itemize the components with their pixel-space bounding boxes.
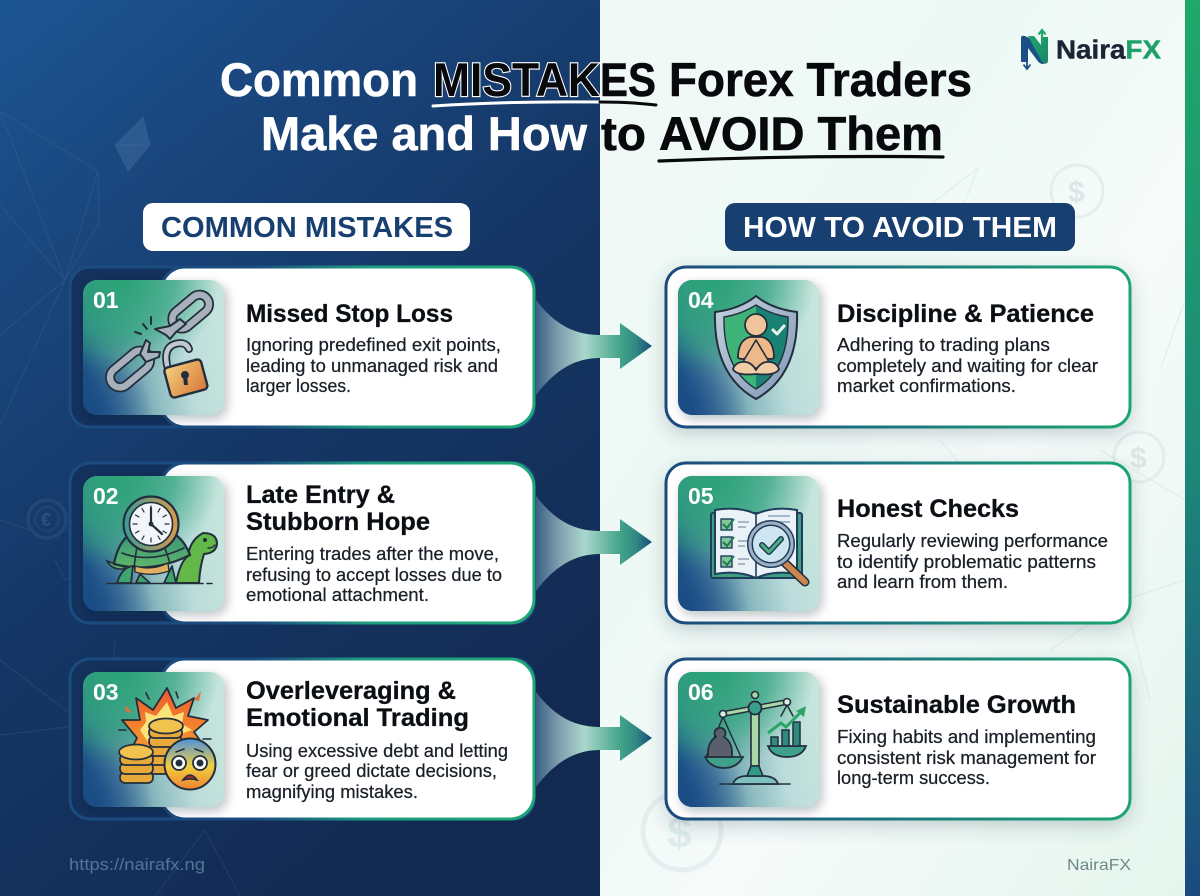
- title: Make and How: [261, 107, 587, 160]
- title: ES: [600, 53, 656, 106]
- description 02: [246, 544, 502, 605]
- description 04: [837, 335, 1098, 396]
- heading: how to avoid them: [725, 203, 1075, 251]
- title: Forex Traders: [669, 53, 972, 106]
- description 02: refusing to accept losses due to: [246, 565, 502, 585]
- panel: mistake 01: [70, 267, 534, 427]
- description 03: magnifying mistakes.: [246, 782, 418, 802]
- heading 03: Emotional Trading: [246, 704, 469, 732]
- description 05: Regularly reviewing performance: [837, 531, 1108, 551]
- heading 02: Stubborn Hope: [246, 508, 430, 536]
- heading 02: [246, 481, 430, 536]
- description 05: to identify problematic patterns: [837, 552, 1096, 572]
- left dark background panel: [0, 0, 600, 896]
- logo wordmark: NairaFX: [1056, 36, 1161, 64]
- title: AVOID Them: [659, 107, 943, 160]
- description 04: market confirmations.: [837, 376, 1016, 396]
- icon: broken chain and padlock: [106, 291, 213, 398]
- icon tile 02: 02: [93, 483, 119, 509]
- panel: solution 05: [666, 463, 1130, 623]
- heading: how to avoid them: HOW TO AVOID THEM: [743, 212, 1057, 244]
- right edge gradient strip: [1185, 0, 1200, 896]
- icon: open book with magnifier: [711, 509, 805, 582]
- icon tile 04: 04: [688, 287, 714, 313]
- panel: mistake 02: [70, 463, 534, 623]
- description 05: [837, 531, 1108, 592]
- background pattern right: $: [1068, 176, 1085, 209]
- icon tile 03: [83, 672, 224, 807]
- title: to: [601, 107, 646, 160]
- heading 03: [246, 677, 469, 732]
- description 03: fear or greed dictate decisions,: [246, 761, 497, 781]
- arrow 2: [536, 496, 652, 591]
- background pattern right: [643, 165, 1185, 870]
- description 03: [246, 741, 508, 802]
- icon tile 01: 01: [93, 287, 119, 313]
- arrow 1: [536, 300, 652, 395]
- heading: common mistakes: [143, 203, 470, 251]
- description 06: long-term success.: [837, 768, 990, 788]
- icon: shield with meditating person: [715, 296, 797, 399]
- icon: explosion, coins and scared face: [119, 688, 216, 790]
- description 03: Using excessive debt and letting: [246, 741, 508, 761]
- description 06: Fixing habits and implementing: [837, 727, 1096, 747]
- right light background panel: [600, 0, 1200, 896]
- background pattern left: [0, 111, 240, 896]
- heading 05: Honest Checks: [837, 495, 1019, 523]
- description 06: [837, 727, 1096, 788]
- icon tile 02: [83, 476, 224, 611]
- description 05: and learn from them.: [837, 572, 1008, 592]
- description 01: larger losses.: [246, 376, 351, 396]
- title: Common: [220, 53, 418, 106]
- icon: NairaFX logo mark: [1021, 30, 1048, 69]
- icon tile 01: [83, 280, 224, 415]
- panel: solution 06: [666, 659, 1130, 819]
- arrow 3: [536, 692, 652, 787]
- description 01: Ignoring predefined exit points,: [246, 335, 501, 355]
- description 02: Entering trades after the move,: [246, 544, 499, 564]
- background pattern right: $: [667, 809, 691, 858]
- icon: balance scale with growth chart: [705, 692, 806, 784]
- icon tile 04: [678, 280, 819, 415]
- icon tile 06: 06: [688, 679, 714, 705]
- background pattern left: €: [41, 510, 51, 530]
- description 02: emotional attachment.: [246, 585, 429, 605]
- heading 06: Sustainable Growth: [837, 691, 1076, 719]
- footer url: https://nairafx.ng: [69, 855, 205, 874]
- description 06: consistent risk management for: [837, 748, 1096, 768]
- title: [220, 53, 972, 161]
- title: MISTAK: [433, 53, 600, 106]
- icon tile 06: [678, 672, 819, 807]
- description 01: [246, 335, 501, 396]
- heading 01: Missed Stop Loss: [246, 300, 453, 328]
- description 04: completely and waiting for clear: [837, 356, 1098, 376]
- heading 03: Overleveraging &: [246, 677, 456, 705]
- heading: common mistakes: COMMON MISTAKES: [161, 212, 453, 244]
- background pattern right: $: [1130, 442, 1147, 475]
- logo: [1021, 30, 1161, 69]
- icon tile 03: 03: [93, 679, 119, 705]
- icon tile 05: 05: [688, 483, 714, 509]
- panel: solution 04: [666, 267, 1130, 427]
- description 04: Adhering to trading plans: [837, 335, 1050, 355]
- description 01: leading to unmanaged risk and: [246, 356, 498, 376]
- icon tile 05: [678, 476, 819, 611]
- heading 04: Discipline & Patience: [837, 300, 1094, 328]
- panel: mistake 03: [70, 659, 534, 819]
- icon: turtle with clock: [107, 496, 217, 584]
- heading 02: Late Entry &: [246, 481, 395, 509]
- footer brand: NairaFX: [1067, 857, 1131, 874]
